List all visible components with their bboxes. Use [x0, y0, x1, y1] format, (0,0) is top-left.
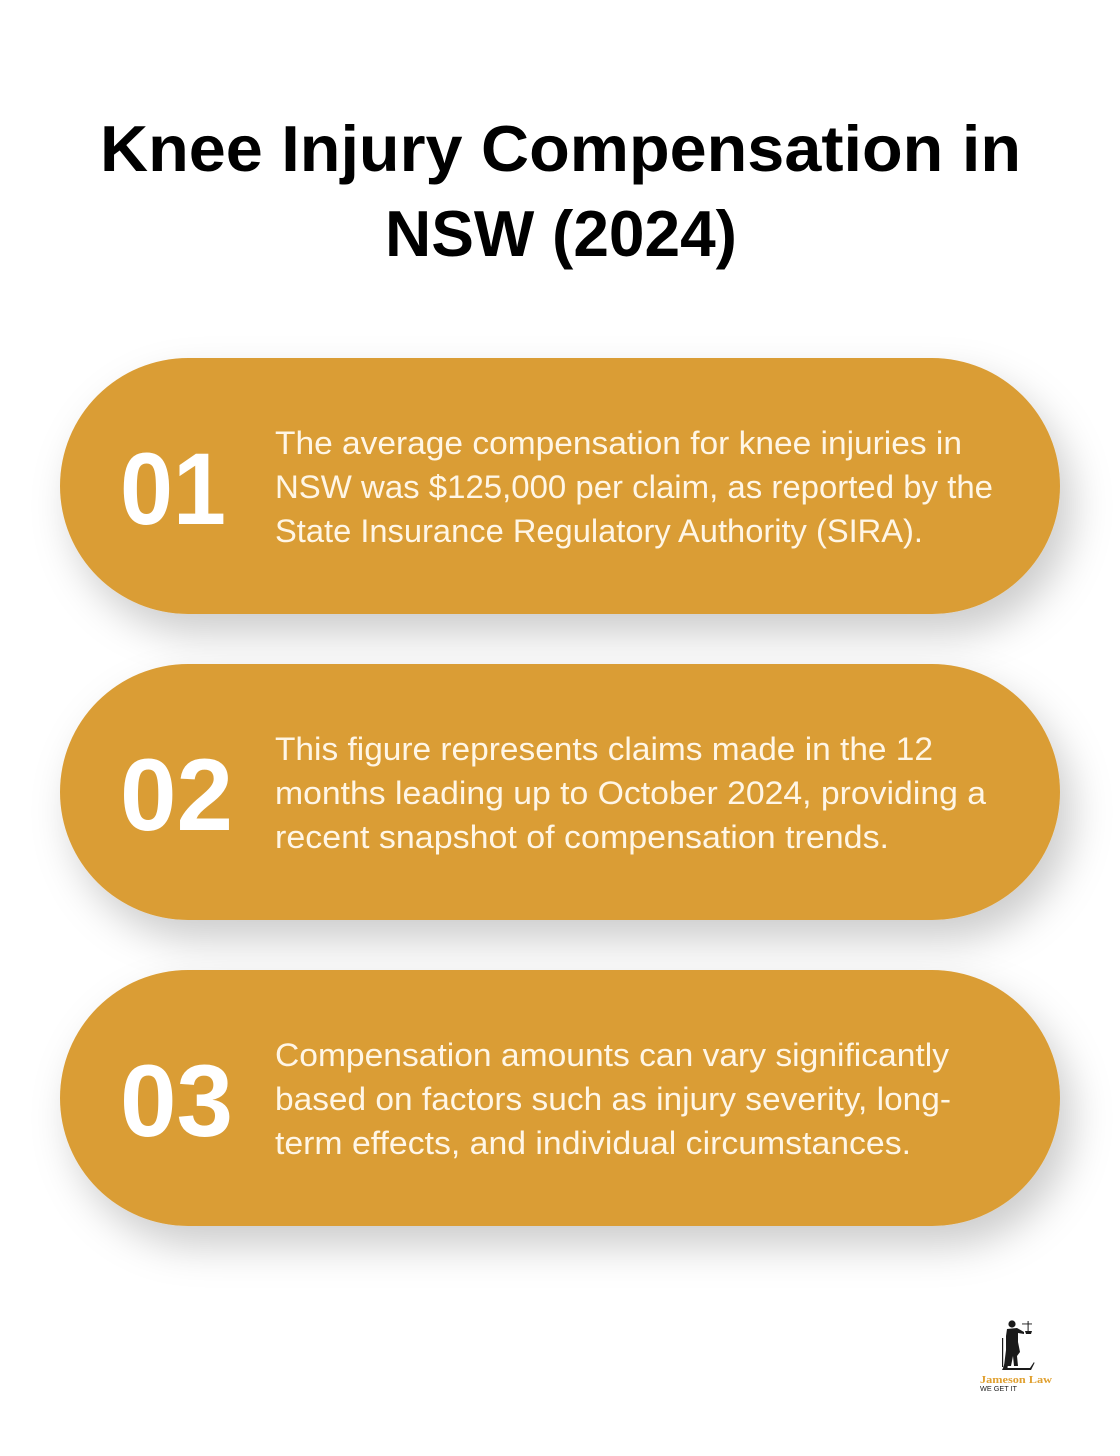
pill background 01	[60, 358, 1060, 614]
text block 01: The average compensation for knee injuries in	[275, 425, 962, 461]
panel: fact 01	[60, 358, 1060, 614]
text block 02: This figure represents claims made in the 12	[275, 731, 933, 767]
text block 03: based on factors such as injury severity, long-	[275, 1081, 951, 1117]
pill background 02	[60, 664, 1060, 920]
text block 03: term effects, and individual circumstances.	[275, 1125, 911, 1161]
text block 01: NSW was $125,000 per claim, as reported by the	[275, 469, 993, 505]
title	[100, 112, 1021, 270]
number 03: 03	[120, 1044, 233, 1158]
text block 02: months leading up to October 2024, providing a	[275, 775, 986, 811]
number 02: 02	[120, 738, 233, 852]
logo tagline: WE GET IT	[980, 1386, 1018, 1393]
text block 01: State Insurance Regulatory Authority (SIRA).	[275, 513, 923, 549]
logo: Jameson Law	[980, 1320, 1052, 1393]
number 01: 01	[120, 432, 226, 546]
text block 02	[275, 731, 986, 855]
pill background 03	[60, 970, 1060, 1226]
panel: fact 02	[60, 664, 1060, 920]
text block 02: recent snapshot of compensation trends.	[275, 819, 889, 855]
text block 01	[275, 425, 993, 549]
panel: fact 03	[60, 970, 1060, 1226]
text block 03: Compensation amounts can vary significantly	[275, 1037, 949, 1073]
title: Knee Injury Compensation in	[100, 112, 1021, 185]
text block 03	[275, 1037, 951, 1161]
icon: lady justice	[1002, 1320, 1034, 1370]
title: NSW (2024)	[385, 197, 737, 270]
logo wordmark: Jameson Law	[980, 1374, 1052, 1386]
